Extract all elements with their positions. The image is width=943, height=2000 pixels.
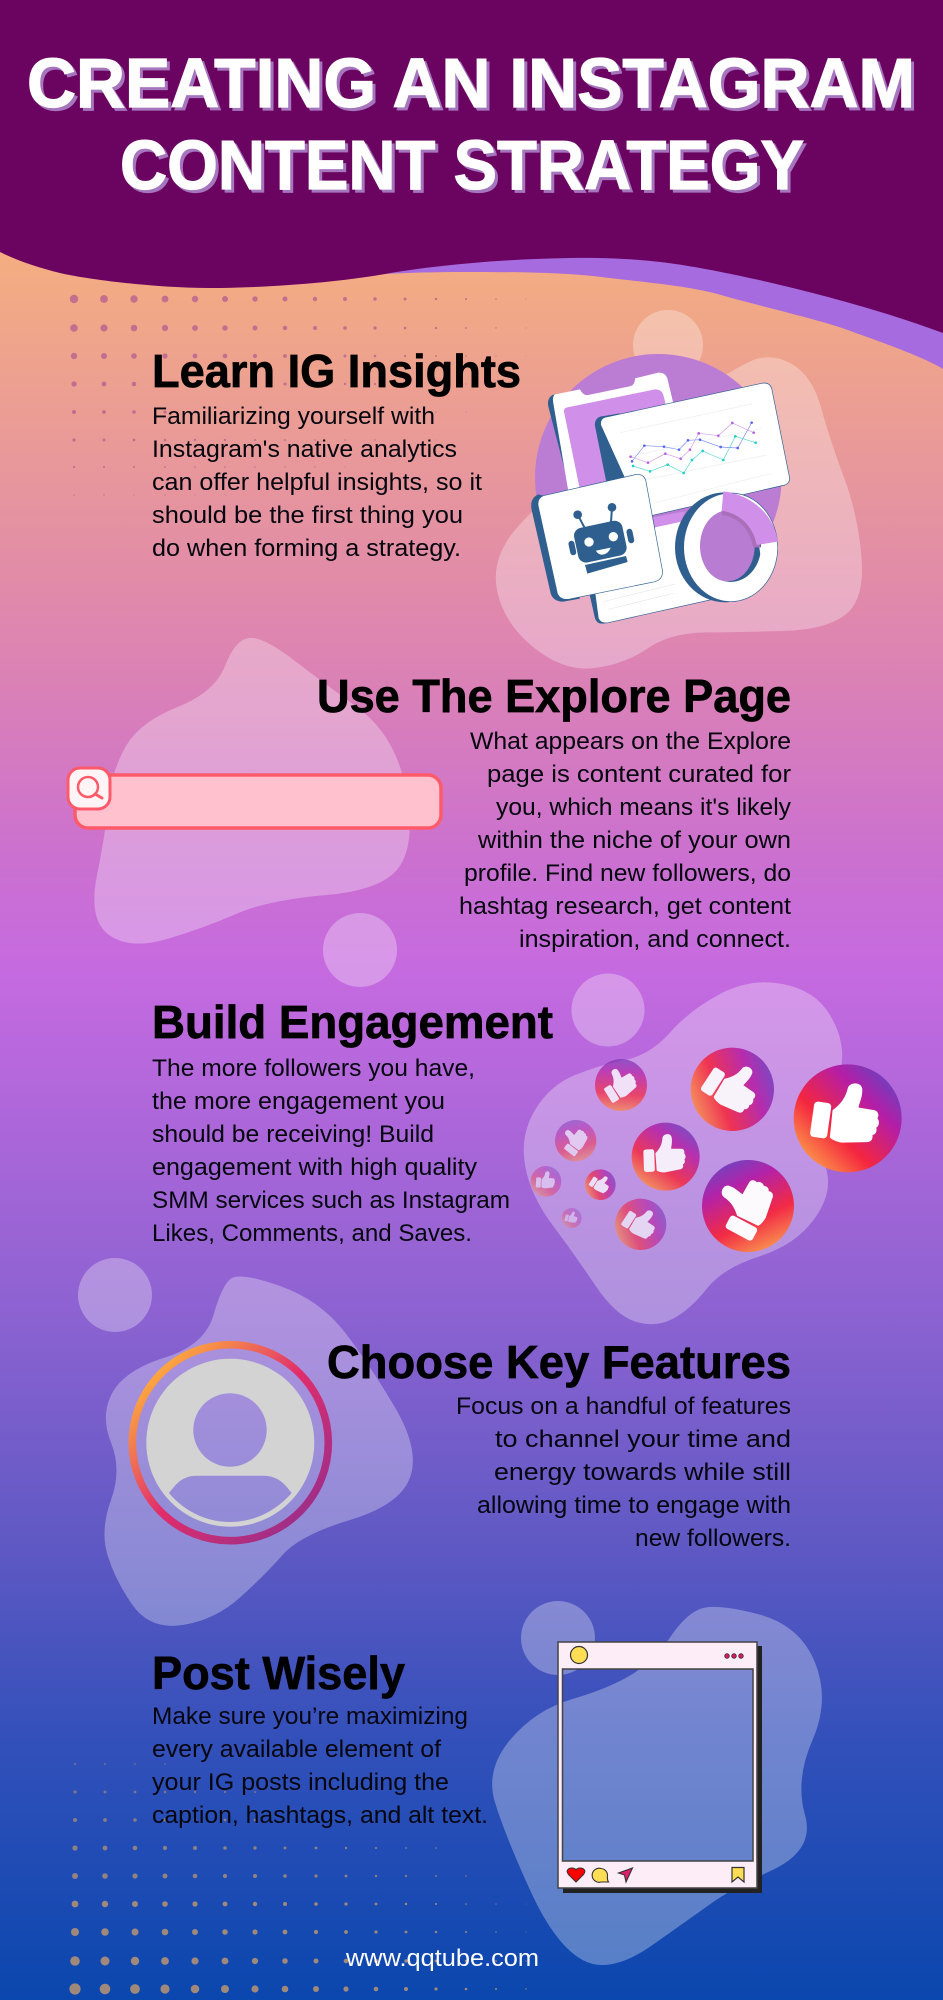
text block: choose key features: Focus on a handful of features [456,1393,791,1420]
icon: analytics dashboard with robot and donut chart [531,354,790,624]
blob behind search bar [94,638,410,987]
heading: learn IG insights: Learn IG Insights [152,345,521,397]
text block: learn IG insights: can offer helpful insights, so it [152,469,482,496]
heading: choose key features: Choose Key Features [327,1336,791,1388]
icon: instagram post frame [558,1642,762,1893]
icon: profile avatar with gradient ring [132,1345,328,1541]
title: CREATING AN INSTAGRAM [27,44,915,122]
text block: choose key features: to channel your time and [495,1426,791,1453]
text block: post wisely: your IG posts including the [152,1769,449,1796]
panel: use the explore page [68,638,791,987]
text block: use the explore page [459,728,791,953]
icon: floating thumbs-up bubbles [529,1034,902,1265]
text block: learn IG insights: Familiarizing yourself with [152,403,435,430]
text block: build engagement: The more followers you have, [152,1055,475,1082]
text block: post wisely [152,1703,488,1829]
text block: build engagement: the more engagement you [152,1088,445,1115]
text block: build engagement: should be receiving! Build [152,1121,434,1148]
text block: use the explore page: within the niche of your own [477,827,791,854]
text block: build engagement: engagement with high quality [152,1154,477,1181]
text block: learn IG insights: Instagram's native analytics [152,436,457,463]
blob behind like bubbles [524,974,842,1324]
text block: use the explore page: profile. Find new followers, do [464,860,791,887]
text block: use the explore page: What appears on the Explore [470,728,791,755]
text block: build engagement: SMM services such as Instagram [152,1187,510,1214]
text block: learn IG insights: should be the first thing you [152,502,463,529]
light purple wave band [340,200,943,369]
text block: choose key features: energy towards while still [494,1459,791,1486]
blob behind analytics illustration [496,310,862,669]
text block: use the explore page: you, which means it's likely [496,794,791,821]
text block: choose key features [456,1393,791,1552]
text block: post wisely: caption, hashtags, and alt text. [152,1802,488,1829]
text block: post wisely: every available element of [152,1736,441,1763]
dark purple header shape [0,0,943,333]
heading: post wisely: Post Wisely [152,1647,405,1699]
decorative dots: top left [70,295,527,496]
heading: use the explore page: Use The Explore Page [317,670,791,722]
heading: build engagement: Build Engagement [152,996,553,1048]
text block: choose key features: allowing time to engage with [477,1492,791,1519]
panel: choose key features [78,1258,791,1626]
text block: post wisely: Make sure you’re maximizing [152,1703,468,1730]
title: CONTENT STRATEGY [120,126,804,204]
panel: build engagement [152,974,902,1324]
text block: use the explore page: inspiration, and connect. [519,926,791,953]
text block: learn IG insights [152,403,482,562]
blob behind profile avatar [78,1258,413,1626]
text block: choose key features: new followers. [635,1525,791,1552]
icon: search bar [68,768,441,828]
title [27,44,915,204]
text block: build engagement [152,1055,510,1247]
panel: post wisely [152,1601,822,1965]
text block: use the explore page: page is content curated for [487,761,791,788]
text block: use the explore page: hashtag research, get content [459,893,791,920]
blob behind post frame [492,1601,822,1965]
panel: learn IG insights [152,310,862,669]
text block: learn IG insights: do when forming a strategy. [152,535,461,562]
decorative dots: bottom left [69,1763,527,1995]
text block: build engagement: Likes, Comments, and Saves. [152,1220,472,1247]
footer website url: www.qqtube.com [345,1945,539,1972]
